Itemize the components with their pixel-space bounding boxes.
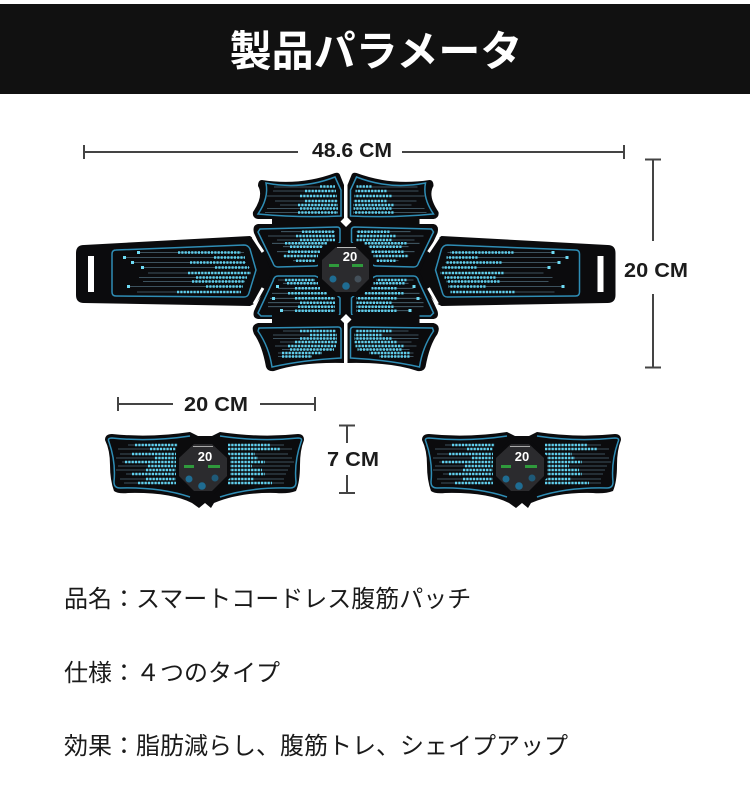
dimension: small pad width 20 CM: 20 CM: [184, 394, 248, 416]
dimension: overall width 48.6 CM: 48.6 CM: [312, 140, 392, 162]
right half of belt: [344, 173, 616, 371]
dimension: small pad width 20 CM: [118, 394, 315, 416]
controller hub: 20: [343, 249, 357, 264]
product diagram: [76, 140, 688, 508]
controller hub: [318, 243, 373, 296]
title: 製品パラメータ: [230, 28, 522, 75]
dimension: small pad height 7 CM: 7 CM: [327, 449, 379, 471]
small pad left: [105, 432, 304, 508]
left half of belt: [76, 173, 347, 371]
small pad right: [422, 432, 621, 508]
dimension: overall width 48.6 CM: [84, 140, 624, 162]
header band: [0, 4, 750, 94]
dimension: small pad height 7 CM: [327, 426, 379, 493]
white diamond gaps: [340, 216, 352, 325]
spec: product name: 品名：スマートコードレス腹筋パッチ: [64, 586, 471, 613]
spec: specification: 仕様：４つのタイプ: [64, 660, 280, 687]
dimension: overall height 20 CM: [624, 160, 688, 368]
dimension: overall height 20 CM: 20 CM: [624, 260, 688, 282]
main abdominal belt device: [76, 173, 616, 371]
spec: effect: 効果：脂肪減らし、腹筋トレ、シェイプアップ: [64, 733, 568, 760]
